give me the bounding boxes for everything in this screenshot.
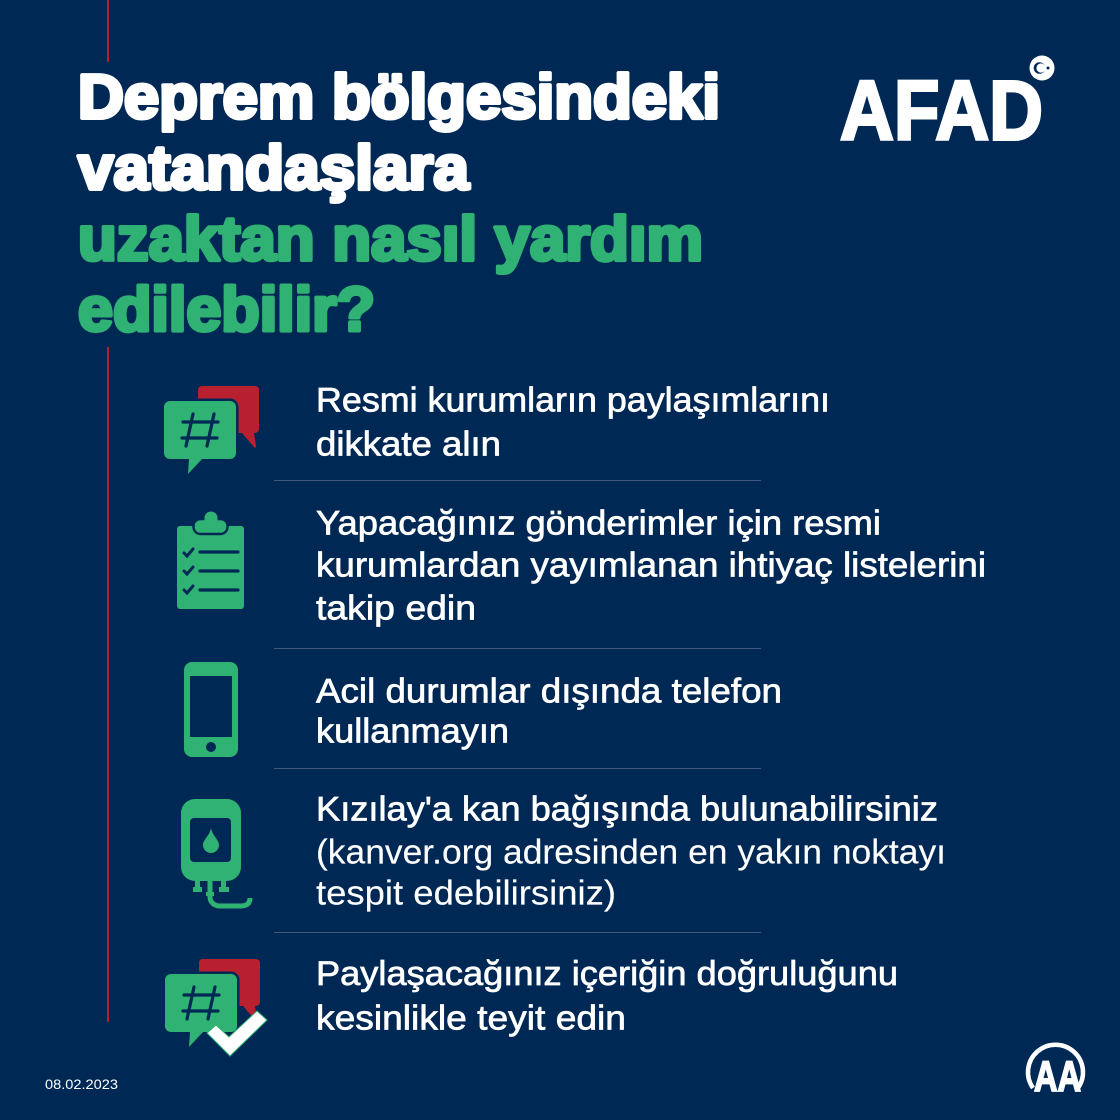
- text: item 2: takip edin: [316, 590, 476, 628]
- title: vatandaşlara: [78, 134, 470, 203]
- icon: bubbles with check mark: [165, 959, 267, 1056]
- text: item 2: [316, 504, 986, 628]
- icon: hashtag speech bubbles: [164, 386, 259, 474]
- text: item 4: tespit edebilirsiniz): [316, 874, 616, 912]
- text: item 5: Paylaşacağınız içeriğin doğruluğunu: [316, 955, 898, 993]
- text: item 3: Acil durumlar dışında telefon: [316, 672, 782, 710]
- AA logo: [1028, 1045, 1083, 1101]
- text: item 3: kullanmayın: [316, 712, 509, 750]
- AA logo: AA: [1034, 1053, 1081, 1101]
- icon: blood bag: [181, 799, 250, 906]
- title: Deprem bölgesindeki: [78, 63, 720, 132]
- text: item 4: Kızılay'a kan bağışında bulunabilirsiniz: [316, 790, 938, 828]
- date: 08.02.2023: [45, 1076, 118, 1092]
- title: uzaktan nasıl yardım: [78, 205, 703, 274]
- text: item 1: dikkate alın: [316, 426, 501, 464]
- icon: clipboard checklist: [177, 512, 244, 609]
- title: edilebilir?: [78, 276, 375, 344]
- icon: mobile phone: [184, 662, 238, 757]
- text: item 4: (kanver.org adresinden en yakın noktayı: [316, 834, 946, 872]
- AFAD logo: AFAD: [840, 64, 1043, 158]
- text: item 2: Yapacağınız gönderimler için resmi: [316, 504, 881, 542]
- text: item 2: kurumlardan yayımlanan ihtiyaç listelerini: [316, 546, 986, 584]
- text: item 5: kesinlikle teyit edin: [316, 1000, 626, 1038]
- text: item 4: [316, 790, 946, 912]
- text: item 3: [316, 672, 782, 750]
- text: item 1: [316, 382, 830, 464]
- text: item 5: [316, 955, 898, 1038]
- text: item 1: Resmi kurumların paylaşımlarını: [316, 382, 830, 420]
- title: [78, 63, 720, 344]
